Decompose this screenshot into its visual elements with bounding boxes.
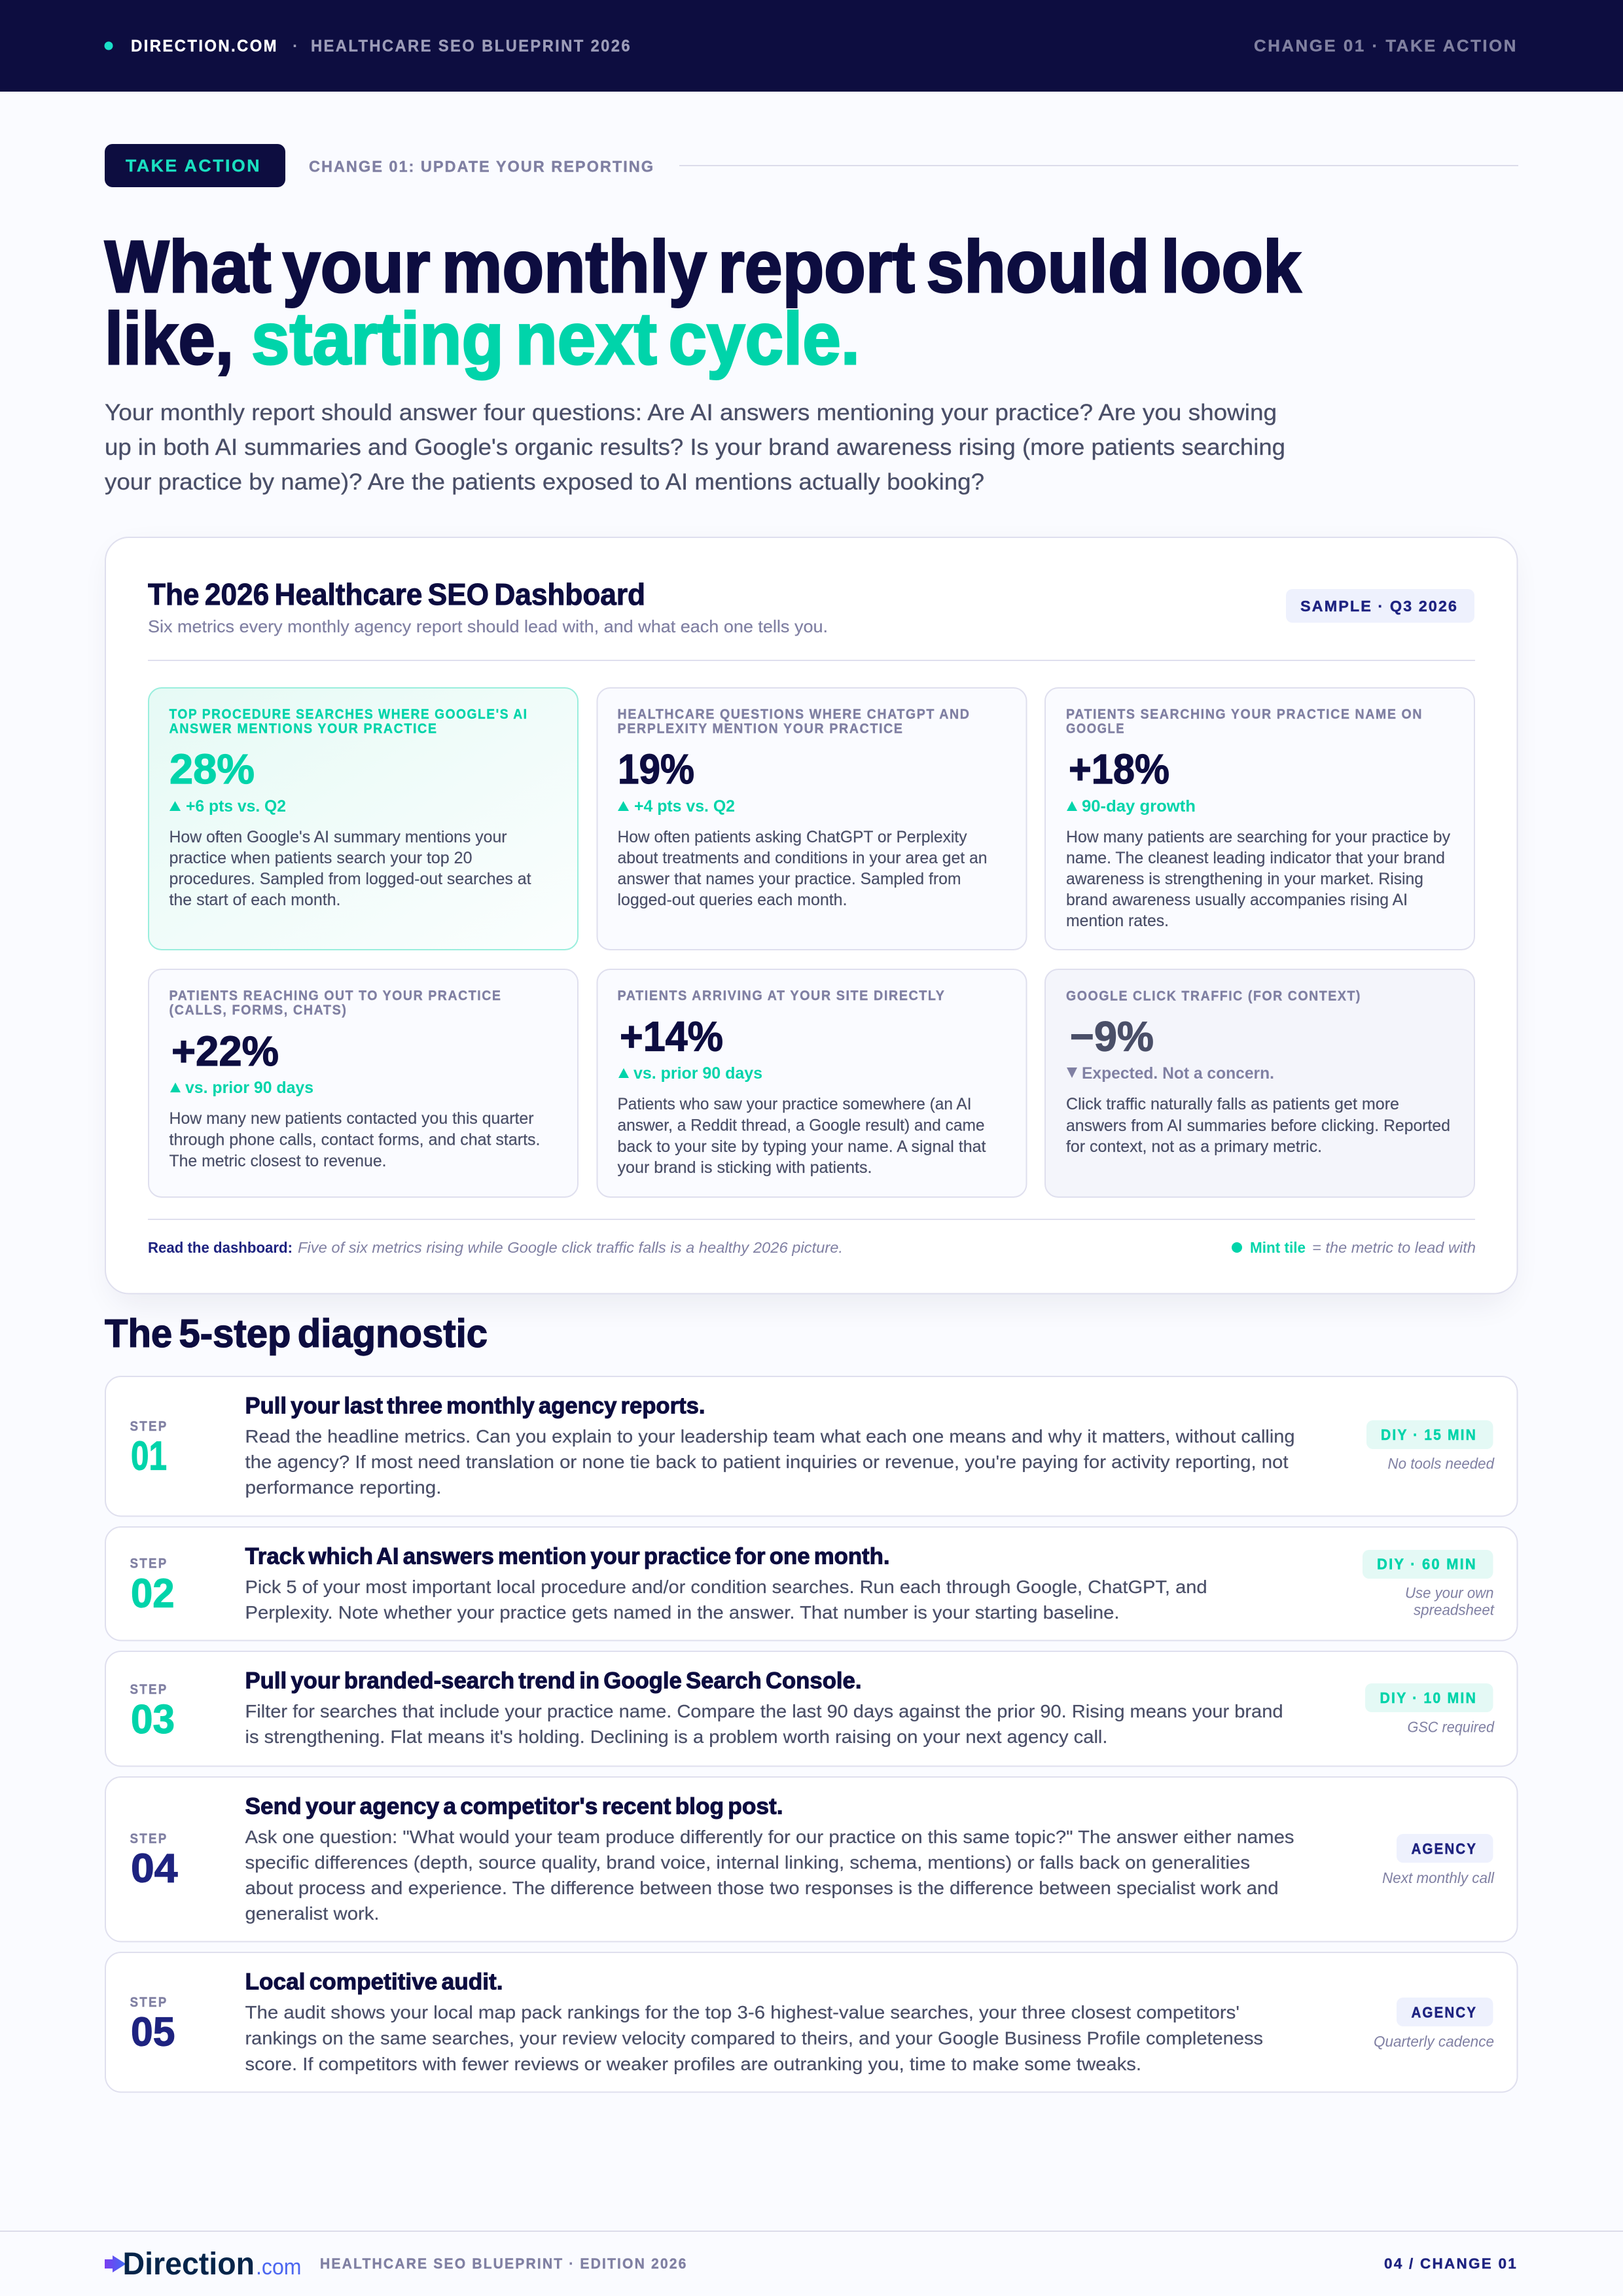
step 04: Send your agency a competitor's recent blog post. <box>245 1793 783 1820</box>
step 02: Pick 5 of your most important local procedure and/or condition searches. Run each through Google, ChatGPT, and <box>245 1577 1207 1597</box>
step 05: Local competitive audit. <box>245 1969 503 1995</box>
metric tile: Google click traffic: GOOGLE CLICK TRAFFIC (FOR CONTEXT) <box>1066 988 1361 1004</box>
eyebrow: take action badge and change label: TAKE ACTION <box>126 156 261 175</box>
metric tile: AI overview mentions: 28% <box>169 745 255 793</box>
step 02: Perplexity. Note whether your practice gets named in the answer. That number is your starting baseline. <box>245 1602 1119 1623</box>
step 02 <box>105 1527 1517 1640</box>
metric tile: Google click traffic: Expected. Not a concern. <box>1082 1064 1274 1083</box>
step 01: performance reporting. <box>245 1477 441 1498</box>
metric tile: Google click traffic: −9% <box>1070 1013 1154 1060</box>
top header bar: DIRECTION.COM <box>131 37 278 55</box>
step 05: The audit shows your local map pack rankings for the top 3-6 highest-value searches, your three closest competitors' <box>245 2002 1240 2022</box>
step 03: is strengthening. Flat means it's holding. Declining is a problem worth raising on your next agency call. <box>245 1727 1108 1747</box>
step 05: AGENCY <box>1411 2004 1477 2021</box>
metric tile: ChatGPT and Perplexity mentions: 19% <box>618 745 694 793</box>
step 03: Filter for searches that include your practice name. Compare the last 90 days against the prior 90. Rising means your brand <box>245 1701 1283 1721</box>
metric tile: AI overview mentions: procedures. Sampled from logged-out searches at <box>169 870 531 888</box>
metric tile: patients reaching out: (CALLS, FORMS, CHATS) <box>169 1002 347 1018</box>
metric tile: ChatGPT and Perplexity mentions: PERPLEXITY MENTION YOUR PRACTICE <box>618 721 903 736</box>
metric tile: branded search: mention rates. <box>1066 912 1169 930</box>
step 05: STEP <box>130 1995 168 2010</box>
title: starting next cycle. <box>251 298 860 380</box>
metric tile: AI overview mentions: +6 pts vs. Q2 <box>186 797 286 816</box>
metric tile: branded search: 90-day growth <box>1082 797 1196 816</box>
step 04: Ask one question: "What would your team produce differently for our practice on this same topic?" The answer either names <box>245 1827 1294 1847</box>
step 01: Pull your last three monthly agency reports. <box>245 1393 705 1419</box>
step 04: AGENCY <box>1411 1840 1477 1857</box>
metric tile: ChatGPT and Perplexity mentions: about treatments and conditions in your area get an <box>618 849 987 867</box>
metric tile: ChatGPT and Perplexity mentions: logged-out queries each month. <box>618 891 847 909</box>
metric tile: patients reaching out: PATIENTS REACHING OUT TO YOUR PRACTICE <box>169 988 501 1003</box>
eyebrow: take action badge and change label <box>105 144 1518 187</box>
step 04 <box>105 1777 1517 1941</box>
step 05 <box>105 1952 1517 2092</box>
metric tile: Google click traffic <box>1045 969 1474 1197</box>
title: What your monthly report should look <box>105 226 1302 308</box>
intro paragraph <box>105 400 1285 495</box>
step 01: the agency? If most need translation or none tie back to patient inquiries or revenue, you're paying for activity reporting, not <box>245 1452 1289 1472</box>
metric tile: AI overview mentions: ANSWER MENTIONS YOUR PRACTICE <box>169 721 437 736</box>
dashboard heading: Six metrics every monthly agency report should lead with, and what each one tells you. <box>148 617 828 636</box>
logo: Direction.com <box>105 2247 301 2282</box>
metric tile: branded search: How many patients are searching for your practice by <box>1066 828 1450 846</box>
heading: 5-step diagnostic: The 5-step diagnostic <box>105 1312 488 1355</box>
top header bar: HEALTHCARE SEO BLUEPRINT 2026 <box>311 37 632 55</box>
metric tile: Google click traffic: answers from AI summaries before clicking. Reported <box>1066 1117 1450 1135</box>
metric tile: patients reaching out: The metric closest to revenue. <box>169 1152 386 1170</box>
step 02: Track which AI answers mention your practice for one month. <box>245 1543 890 1570</box>
metric tile: Google click traffic: for context, not as a primary metric. <box>1066 1138 1322 1156</box>
legend: mint tile: = the metric to lead with <box>1312 1239 1476 1256</box>
footer: 04 / CHANGE 01 <box>1384 2255 1518 2272</box>
intro paragraph: your practice by name)? Are the patients exposed to AI mentions actually booking? <box>105 469 984 495</box>
metric tile: direct site arrivals: Patients who saw your practice somewhere (an AI <box>618 1095 971 1113</box>
metric tile: direct site arrivals: PATIENTS ARRIVING AT YOUR SITE DIRECTLY <box>618 988 945 1003</box>
footer: HEALTHCARE SEO BLUEPRINT · EDITION 2026 <box>320 2255 687 2272</box>
step 02: 02 <box>131 1571 174 1617</box>
metric tile: ChatGPT and Perplexity mentions <box>597 688 1026 950</box>
metric tile: AI overview mentions: TOP PROCEDURE SEARCHES WHERE GOOGLE'S AI <box>169 706 527 722</box>
step 01: No tools needed <box>1387 1455 1495 1472</box>
metric tile: direct site arrivals: answer, a Reddit thread, a Google result) and came <box>618 1117 984 1135</box>
step 02: Use your own <box>1405 1584 1493 1601</box>
step 01: STEP <box>130 1419 168 1434</box>
intro paragraph: Your monthly report should answer four questions: Are AI answers mentioning your practice? Are you showing <box>105 400 1277 425</box>
dashboard heading <box>148 577 828 636</box>
title <box>105 226 1302 380</box>
dashboard heading: The 2026 Healthcare SEO Dashboard <box>148 577 645 611</box>
step 05: rankings on the same searches, your review velocity compared to theirs, and your Google Business Profile completeness <box>245 2028 1263 2049</box>
step 05: score. If competitors with fewer reviews or weaker profiles are outranking you, time to make some tweaks. <box>245 2054 1141 2074</box>
logo: Direction.com: Direction <box>123 2247 255 2282</box>
dashboard reading note: Five of six metrics rising while Google click traffic falls is a healthy 2026 picture. <box>298 1239 843 1256</box>
metric tile: ChatGPT and Perplexity mentions: HEALTHCARE QUESTIONS WHERE CHATGPT AND <box>618 706 970 722</box>
step 04: 04 <box>131 1846 178 1892</box>
metric tile: branded search: +18% <box>1069 745 1169 793</box>
metric tile: Google click traffic: Click traffic naturally falls as patients get more <box>1066 1095 1399 1113</box>
top header bar: CHANGE 01 · TAKE ACTION <box>1254 37 1518 55</box>
metric tile: AI overview mentions: the start of each month. <box>169 891 340 909</box>
step 02: spreadsheet <box>1414 1601 1495 1618</box>
step 04: generalist work. <box>245 1903 380 1924</box>
intro paragraph: up in both AI summaries and Google's organic results? Is your brand awareness rising (more patients searching <box>105 435 1285 460</box>
metric tile: direct site arrivals: your brand is sticking with patients. <box>618 1158 872 1177</box>
footer <box>0 2231 1623 2282</box>
metric tile: branded search: brand awareness usually accompanies rising AI <box>1066 891 1408 909</box>
metric tile: branded search <box>1045 688 1474 950</box>
metric tile: AI overview mentions <box>149 688 578 950</box>
metric tile: AI overview mentions: practice when patients search your top 20 <box>169 849 473 867</box>
legend: mint tile: Mint tile <box>1250 1239 1306 1256</box>
step 04: STEP <box>130 1831 168 1846</box>
top header bar <box>0 0 1623 92</box>
metric tile: AI overview mentions: How often Google's AI summary mentions your <box>169 828 507 846</box>
metric tile: direct site arrivals: back to your site by typing your name. A signal that <box>618 1138 986 1156</box>
metric tile: direct site arrivals: vs. prior 90 days <box>633 1064 762 1083</box>
top header bar: · <box>293 37 298 55</box>
step 05: Quarterly cadence <box>1374 2033 1494 2050</box>
step 01: 01 <box>131 1433 167 1479</box>
step 01: Read the headline metrics. Can you explain to your leadership team what each one means and why it matters, without calling <box>245 1426 1295 1446</box>
step 04: Next monthly call <box>1382 1869 1495 1886</box>
metric tile: patients reaching out: +22% <box>171 1028 279 1075</box>
sample badge: SAMPLE · Q3 2026 <box>1300 598 1458 615</box>
panel: dashboard <box>105 537 1517 1303</box>
step 04: about process and experience. The difference between those two responses is the difference between specialist work and <box>245 1878 1279 1898</box>
metric tile: ChatGPT and Perplexity mentions: How often patients asking ChatGPT or Perplexity <box>618 828 967 846</box>
legend: mint tile <box>1232 1239 1476 1256</box>
step 03: Pull your branded-search trend in Google Search Console. <box>245 1668 861 1694</box>
logo: Direction.com: .com <box>256 2255 301 2280</box>
metric tile: branded search: GOOGLE <box>1066 721 1125 736</box>
metric tile: patients reaching out: through phone calls, contact forms, and chat starts. <box>169 1131 541 1149</box>
metric tile: branded search: PATIENTS SEARCHING YOUR PRACTICE NAME ON <box>1066 706 1423 722</box>
step 02: STEP <box>130 1556 168 1571</box>
dashboard reading note: Read the dashboard: <box>148 1239 293 1256</box>
metric tile: patients reaching out: vs. prior 90 days <box>185 1079 313 1097</box>
step 03 <box>105 1651 1517 1766</box>
metric tile: patients reaching out <box>149 969 578 1197</box>
title: like, <box>105 298 234 380</box>
step 01: DIY · 15 MIN <box>1381 1426 1477 1443</box>
metric tile: direct site arrivals: +14% <box>620 1013 723 1060</box>
step 04: specific differences (depth, source quality, brand voice, internal linking, schema, mentions) or falls back on generalities <box>245 1852 1250 1873</box>
metric tile: ChatGPT and Perplexity mentions: +4 pts vs. Q2 <box>634 797 735 816</box>
metric tile: direct site arrivals <box>597 969 1026 1197</box>
metric tile: ChatGPT and Perplexity mentions: answer that names your practice. Sampled from <box>618 870 961 888</box>
metric tile: branded search: awareness is strengthening in your market. Rising <box>1066 870 1423 888</box>
metric tile: branded search: name. The cleanest leading indicator that your brand <box>1066 849 1445 867</box>
step 03: 03 <box>131 1697 175 1742</box>
step 05: 05 <box>131 2009 175 2055</box>
metric tile: patients reaching out: How many new patients contacted you this quarter <box>169 1109 534 1128</box>
step 02: DIY · 60 MIN <box>1377 1555 1477 1572</box>
step 01 <box>105 1376 1517 1516</box>
eyebrow: take action badge and change label: CHANGE 01: UPDATE YOUR REPORTING <box>309 158 654 175</box>
sample badge <box>1286 589 1474 623</box>
step 03: STEP <box>130 1682 168 1697</box>
step 03: DIY · 10 MIN <box>1380 1689 1477 1706</box>
step 03: GSC required <box>1407 1719 1495 1736</box>
